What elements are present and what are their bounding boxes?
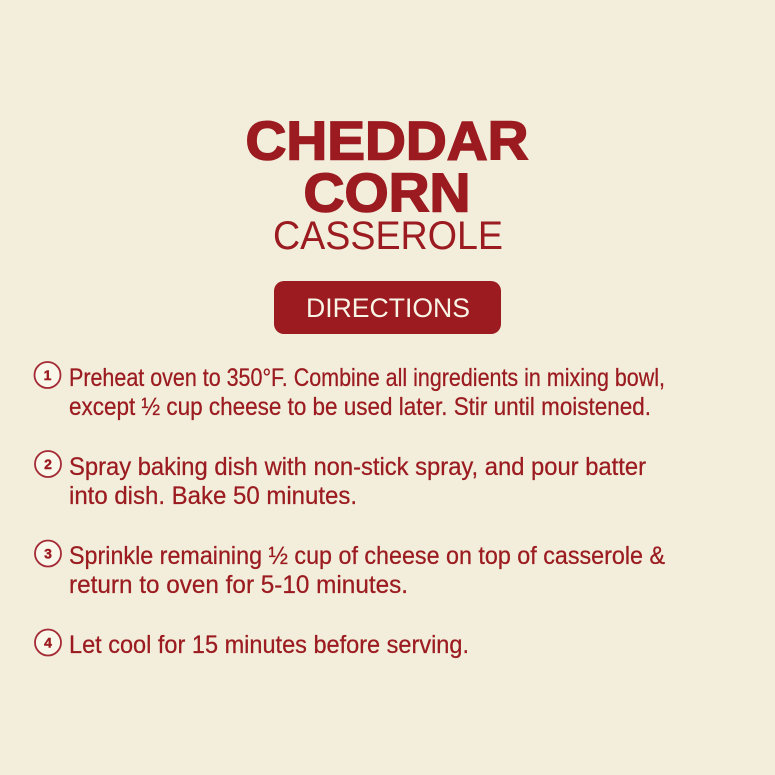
directions heading button [274, 281, 501, 334]
title: CORN [304, 162, 470, 224]
number badge 1: 1 [44, 367, 52, 383]
title [246, 110, 528, 258]
step 1 [34, 362, 665, 421]
title: CASSEROLE [273, 214, 503, 258]
step 3 [35, 540, 665, 599]
step 2: into dish. Bake 50 minutes. [69, 482, 357, 510]
number badge 4 [35, 630, 61, 656]
step 1: Preheat oven to 350°F. Combine all ingredients in mixing bowl, [69, 364, 665, 392]
step 3: Sprinkle remaining ½ cup of cheese on top of casserole & [69, 542, 665, 570]
step 1: except ½ cup cheese to be used later. Stir until moistened. [69, 393, 651, 421]
step 2 [35, 451, 646, 510]
step 4: Let cool for 15 minutes before serving. [69, 631, 469, 659]
number badge 3 [35, 540, 61, 566]
number badge 2: 2 [44, 456, 52, 472]
number badge 1 [34, 362, 60, 388]
step 3: return to oven for 5-10 minutes. [69, 571, 408, 599]
number badge 2 [35, 451, 61, 477]
directions heading button: DIRECTIONS [306, 293, 470, 323]
number badge 3: 3 [44, 546, 52, 562]
step 2: Spray baking dish with non-stick spray, and pour batter [69, 453, 646, 481]
number badge 4: 4 [44, 634, 52, 650]
title: CHEDDAR [246, 110, 528, 172]
